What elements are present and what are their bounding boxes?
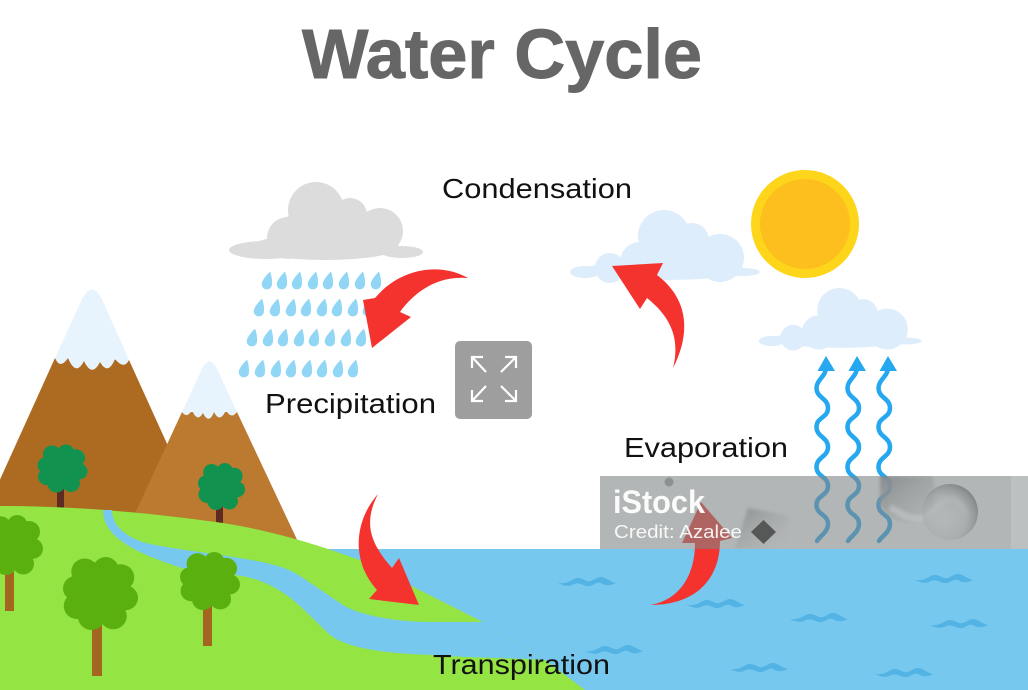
icon: evaporation cloud (759, 288, 921, 350)
watermark text (613, 484, 742, 542)
arrow: clouds to precipitation (363, 269, 468, 348)
icon: sun (751, 170, 859, 278)
tree on big mountain (38, 444, 88, 508)
label: condensation: Condensation (442, 173, 632, 204)
tree centre (63, 557, 138, 676)
arrow: sea to evaporation (650, 502, 732, 605)
watermark band (600, 476, 1028, 549)
expand icon (455, 341, 532, 419)
watermark text: Credit: Azalee (614, 521, 742, 542)
tree on small mountain (198, 463, 245, 524)
icon: big mountain snow cap (55, 290, 129, 370)
icon: condensation cloud (570, 210, 760, 283)
tree left edge (0, 515, 43, 611)
label: transpiration: Transpiration (433, 649, 610, 680)
tree by river (180, 552, 240, 646)
icon: rain drops (239, 272, 381, 377)
icon: sea waves (558, 574, 988, 677)
icon: rising vapour arrows (816, 356, 897, 541)
watermark text: iStock (613, 484, 705, 520)
icon: small mountain (120, 362, 300, 546)
panel: green land (0, 506, 585, 690)
icon: rain cloud (229, 182, 423, 260)
icon: small mountain snow cap (182, 362, 237, 419)
river (103, 510, 545, 660)
title: Water Cycle (302, 15, 702, 93)
arrow: precipitation to land (359, 494, 419, 605)
label: evaporation: Evaporation (624, 432, 788, 463)
arrow: evaporation to condensation (612, 263, 684, 368)
label: precipitation: Precipitation (265, 388, 436, 419)
panel: sea (325, 549, 1028, 690)
icon: big mountain (0, 290, 198, 545)
